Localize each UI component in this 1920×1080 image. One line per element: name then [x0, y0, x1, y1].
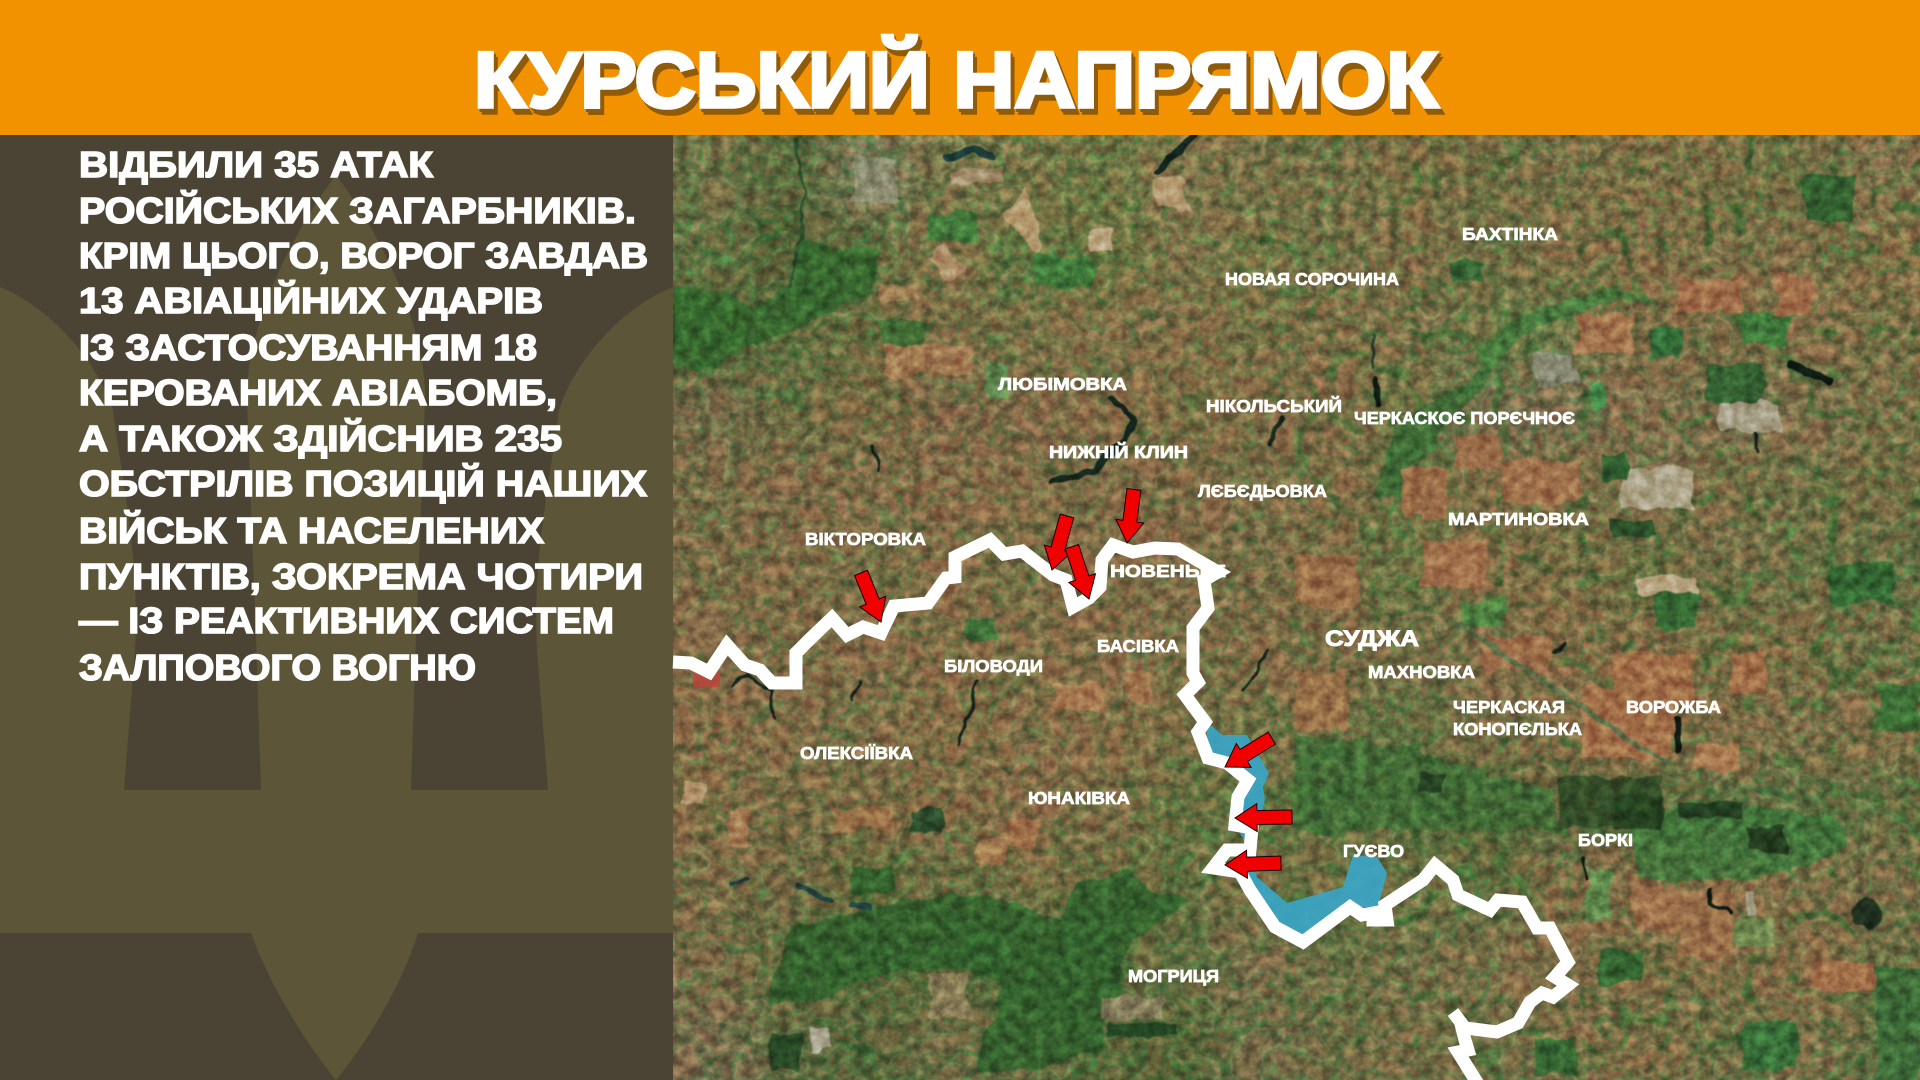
title: КУРСЬКИЙ НАПРЯМОК	[474, 34, 1439, 124]
arrow: attack at blue zone south	[1225, 849, 1281, 879]
text block: summary of attacks: ІЗ ЗАСТОСУВАННЯМ 18	[79, 327, 537, 368]
text block: summary of attacks: А ТАКОЖ ЗДІЙСНИВ 235	[79, 417, 562, 459]
settlement labels: ГУЄВО	[1343, 841, 1404, 861]
settlement labels: МАРТИНОВКА	[1448, 509, 1589, 529]
occupied zone marker	[693, 672, 720, 687]
text block: summary of attacks: КРІМ ЦЬОГО, ВОРОГ ЗАВДАВ	[79, 235, 648, 276]
settlement labels: КОНОПЄЛЬКА	[1453, 719, 1582, 739]
settlement labels: ЧЕРКАСКАЯ	[1453, 697, 1565, 717]
settlement labels: БОРКІ	[1578, 830, 1633, 850]
arrow: attack at Viktorovka	[848, 568, 894, 627]
settlement labels: НІКОЛЬСЬКИЙ	[1206, 395, 1342, 416]
settlement labels: ВІКТОРОВКА	[805, 529, 926, 549]
arrow: attack at blue zone north	[1218, 726, 1279, 779]
settlement labels: ЧЕРКАСКОЄ ПОРЄЧНОЄ	[1354, 408, 1575, 428]
settlement labels	[800, 224, 1721, 986]
text block: summary of attacks: ВІДБИЛИ 35 АТАК	[79, 144, 434, 185]
text block: summary of attacks: РОСІЙСЬКИХ ЗАГАРБНИКІВ.	[79, 189, 636, 231]
arrow: attack at blue zone centre	[1235, 803, 1292, 832]
white border line	[673, 540, 1568, 1080]
arrow: attack at Nyzhnii Klyn south	[1059, 542, 1102, 603]
text block: summary of attacks: ВІЙСЬК ТА НАСЕЛЕНИХ	[79, 509, 544, 551]
settlement labels: НИЖНІЙ КЛИН	[1049, 441, 1188, 462]
text block: summary of attacks: ОБСТРІЛІВ ПОЗИЦІЙ НАШИХ	[79, 462, 647, 504]
text block: summary of attacks: КЕРОВАНИХ АВІАБОМБ,	[79, 372, 557, 413]
settlement labels: БАХТІНКА	[1462, 224, 1558, 244]
settlement labels: НОВЕНЬКЕ	[1110, 561, 1226, 581]
text block: summary of attacks: 13 АВІАЦІЙНИХ УДАРІВ	[79, 279, 543, 321]
arrow: attack at Nyzhnii Klyn west	[1039, 512, 1080, 574]
settlement labels: НОВАЯ СОРОЧИНА	[1225, 269, 1399, 289]
settlement labels: СУДЖА	[1325, 626, 1419, 651]
settlement labels: МАХНОВКА	[1368, 662, 1475, 682]
settlement labels: ЮНАКІВКА	[1028, 788, 1130, 808]
left panel with trident emblem	[0, 135, 673, 1080]
settlement labels: ОЛЕКСІЇВКА	[800, 743, 913, 763]
text block: summary of attacks	[79, 144, 648, 688]
settlement labels: ВОРОЖБА	[1626, 697, 1721, 717]
settlement labels: МОГРИЦЯ	[1128, 966, 1219, 986]
text block: summary of attacks: — ІЗ РЕАКТИВНИХ СИСТЕМ	[79, 600, 614, 641]
text block: summary of attacks: ПУНКТІВ, ЗОКРЕМА ЧОТИРИ	[79, 556, 643, 597]
settlement labels: ЛЮБІМОВКА	[998, 374, 1127, 394]
blue area of advance along the border	[1207, 722, 1387, 937]
settlement labels: ЛЄБЄДЬОВКА	[1198, 481, 1327, 501]
arrow: attack at Novenke	[1113, 488, 1148, 545]
settlement labels: БАСІВКА	[1097, 636, 1179, 656]
text block: summary of attacks: ЗАЛПОВОГО ВОГНЮ	[79, 647, 476, 688]
settlement labels: БІЛОВОДИ	[944, 656, 1043, 676]
header bar	[0, 0, 1920, 135]
satellite map background	[623, 85, 1920, 1080]
